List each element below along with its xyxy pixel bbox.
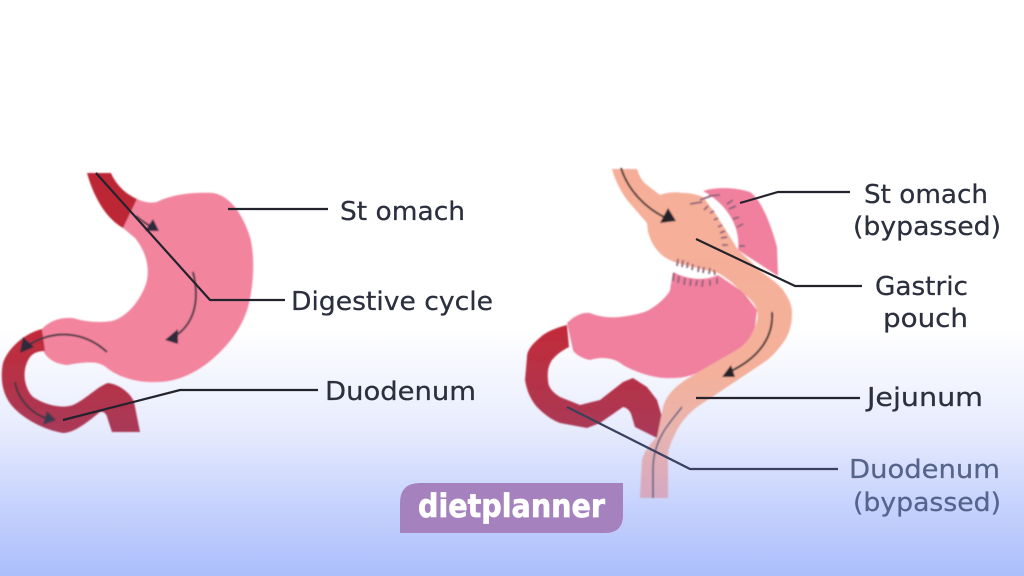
label: Gastric pouch [875,272,968,334]
stomach body [42,193,253,382]
arrow: to duodenum [20,335,107,353]
label: Duodenum (bypassed) [849,455,1001,518]
bypassed stomach upper [703,188,778,276]
esophagus [87,173,137,228]
line: duodenal path [653,407,682,498]
arrow: along duodenum [15,382,56,425]
leader lines: gastric bypass [567,192,862,469]
duodenum bypassed [525,325,665,438]
logo: dietplanner [400,483,623,533]
arrow: through stomach [165,272,196,344]
label: Stomach (bypassed) [853,180,1001,242]
arrow: into pouch [621,168,676,223]
label: Stomach (bypassed): (bypassed) [853,212,1001,242]
staples [673,195,745,287]
arrow: down jejunum [722,312,772,377]
label: Stomach (bypassed): St omach [864,180,988,210]
logo: dietplanner: dietplanner [418,487,605,525]
label: Jejunum: Jejunum [865,383,983,413]
gastric pouch and jejunum [612,169,792,498]
label: Digestive cycle: Digestive cycle [291,287,493,317]
diagram: normal stomach [2,173,253,433]
label: Duodenum (bypassed): Duodenum [849,455,1000,485]
arrow: esophagus to stomach [136,216,159,231]
bypassed stomach lower [567,272,757,378]
diagram: gastric bypass [525,168,792,498]
label: Gastric pouch: Gastric [875,272,968,302]
label: Stomach: St omach [340,197,465,227]
duodenum [2,329,140,433]
label: Duodenum (bypassed): (bypassed) [853,488,1001,518]
leader lines: normal stomach [63,173,328,420]
label: Duodenum: Duodenum [325,377,476,407]
label: Gastric pouch: pouch [883,304,968,334]
